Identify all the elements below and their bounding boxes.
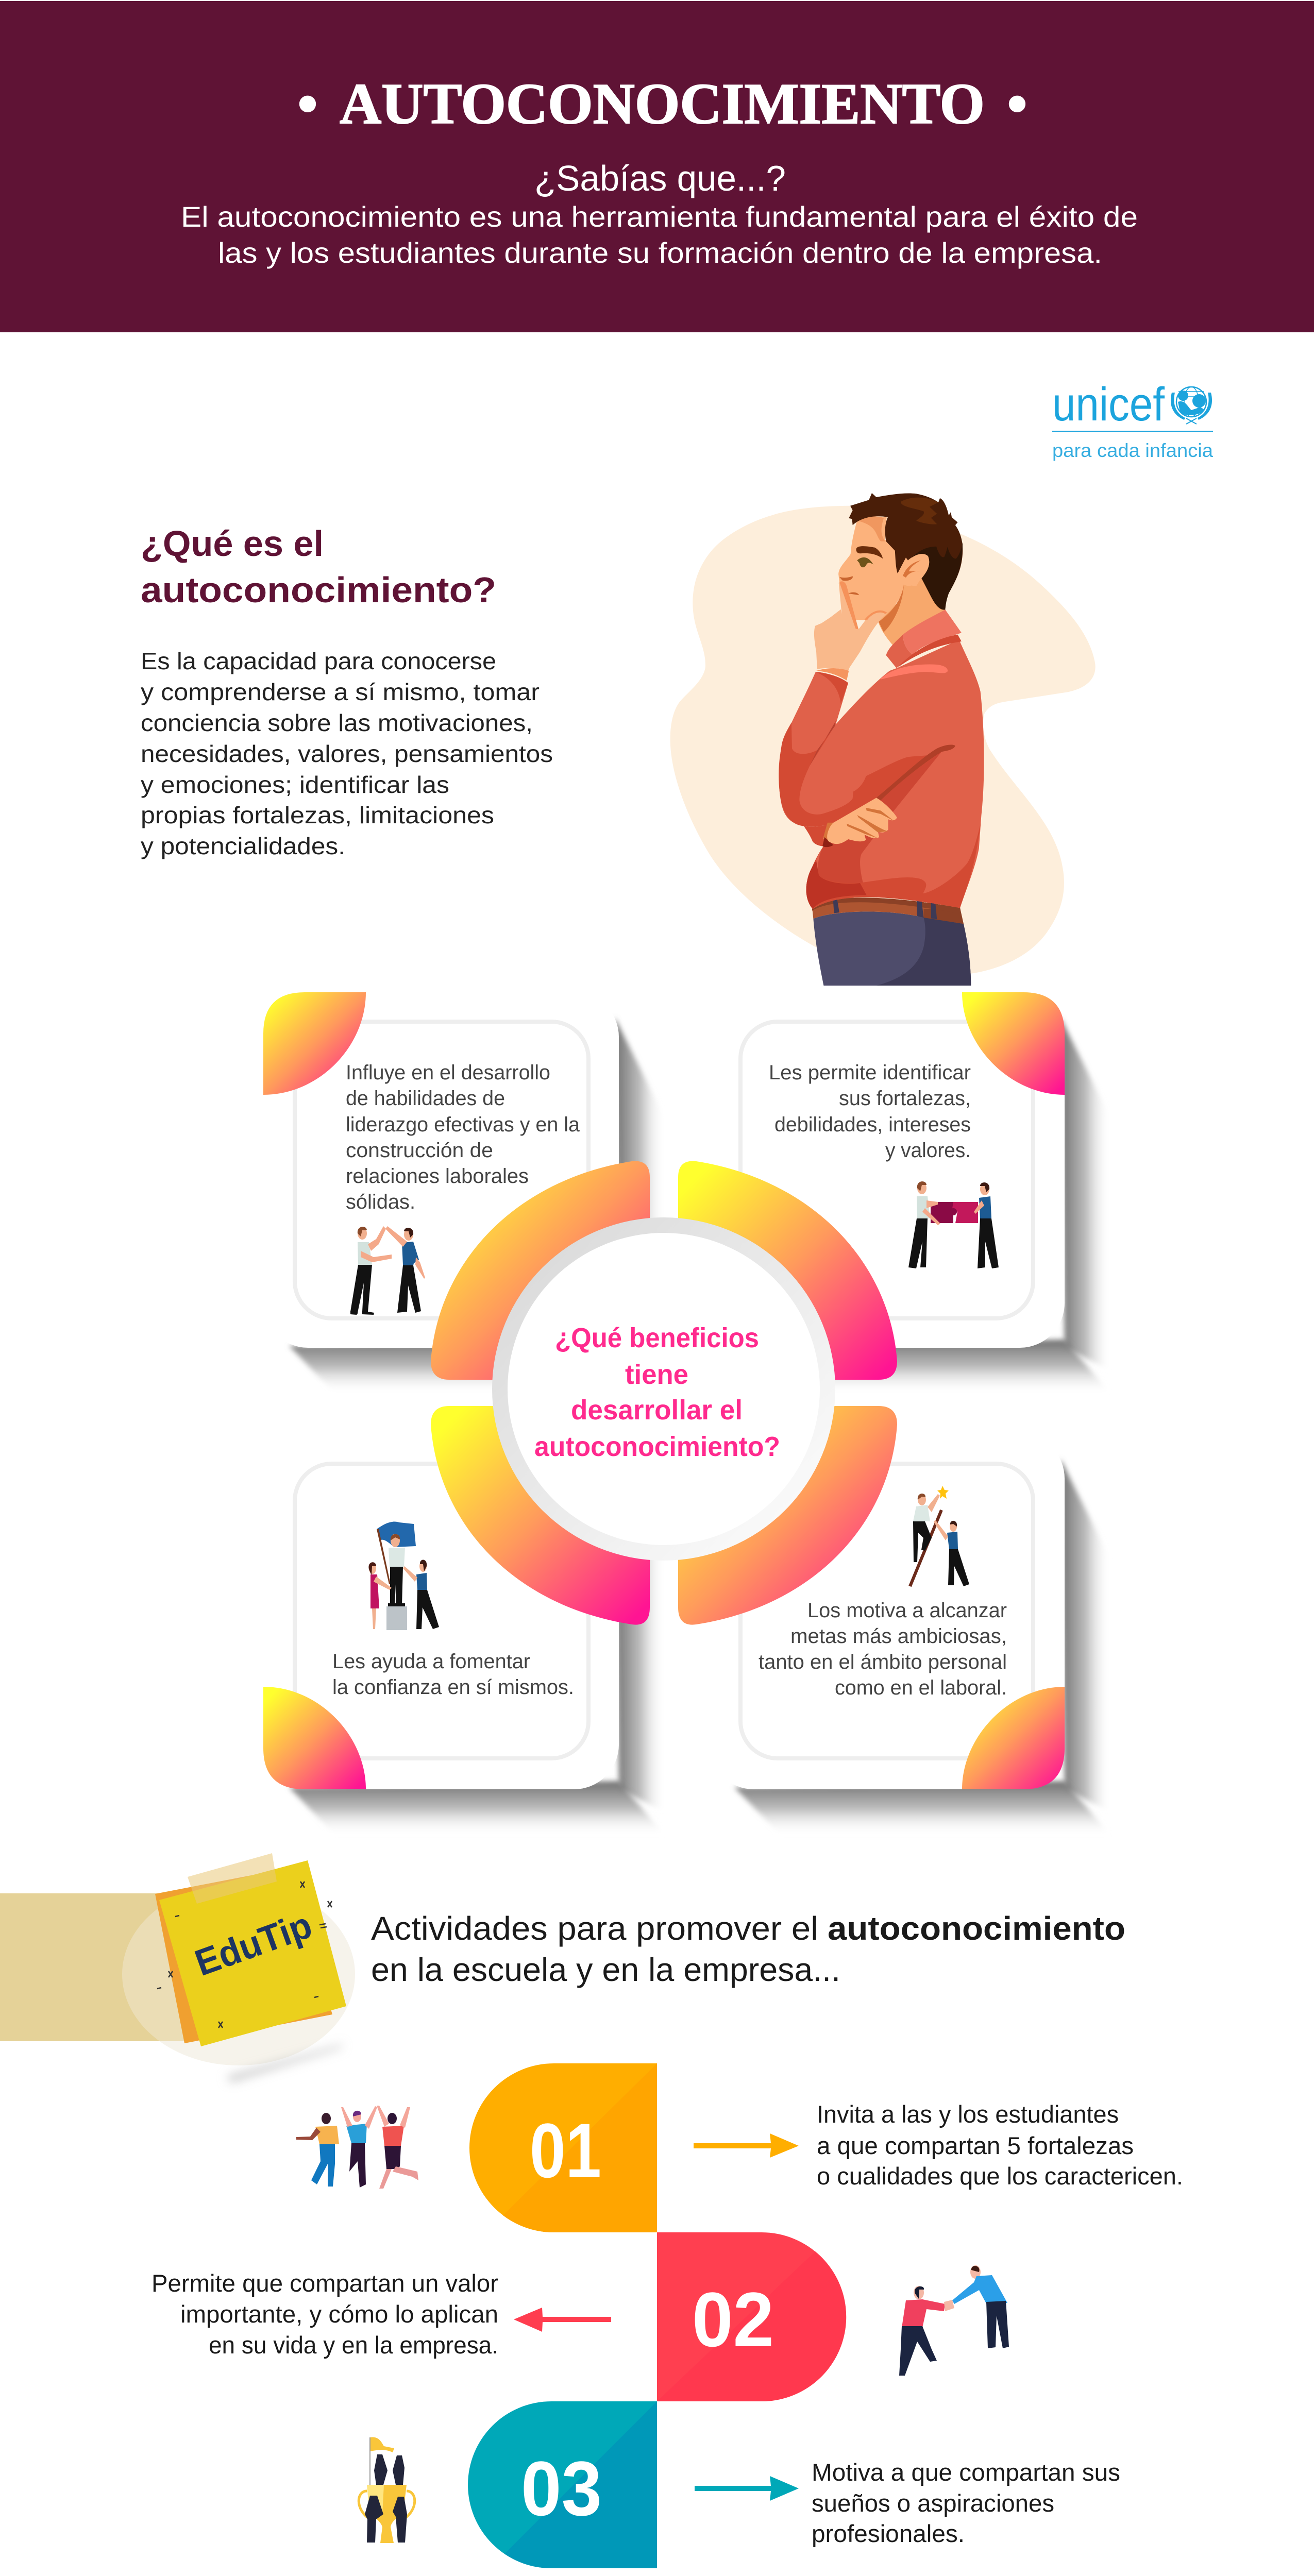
icon: helping handshake [899, 2265, 1009, 2376]
center question: autoconocimiento? [534, 1431, 780, 1462]
definition text block: y emociones; identificar las [141, 771, 449, 798]
step 01 text: Invita a las y los estudiantes [817, 2100, 1119, 2128]
blob background [670, 506, 1096, 974]
definition text block: y comprenderse a sí mismo, tomar [141, 679, 540, 705]
step 01 text [817, 2100, 1183, 2190]
illustration: thinking man [670, 493, 1096, 986]
step 03 text: profesionales. [812, 2520, 965, 2547]
icon: high five [350, 1226, 425, 1315]
arrow 02 [514, 2308, 611, 2332]
card: metas [709, 1434, 1110, 1835]
edutip badge [0, 1853, 355, 2081]
card text [759, 1599, 1007, 1699]
arrow 03 [695, 2476, 799, 2501]
icon: star ladder [910, 1486, 969, 1586]
unicef logo: para cada infancia [1052, 440, 1213, 461]
title: AUTOCONOCIMIENTO [340, 72, 985, 136]
card text [332, 1650, 574, 1699]
step 03 text: Motiva a que compartan sus [812, 2459, 1120, 2486]
center question [534, 1323, 780, 1462]
card: liderazgo [263, 992, 665, 1394]
unicef logo [1052, 378, 1213, 461]
card text: sus fortalezas, [839, 1087, 971, 1110]
edutip label: EduTip [190, 1905, 317, 1984]
arrow 01 [694, 2133, 799, 2158]
card text: relaciones laborales [346, 1165, 529, 1188]
section heading: que es: autoconocimiento? [141, 570, 496, 610]
card text: metas más ambiciosas, [790, 1625, 1007, 1648]
icon: trophy team [359, 2437, 415, 2543]
badge 01 [469, 2063, 657, 2232]
definition text block: propias fortalezas, limitaciones [141, 802, 494, 828]
intro text [181, 200, 1138, 269]
step 02 text: en su vida y en la empresa. [209, 2331, 498, 2359]
definition text block: y potencialidades. [141, 833, 345, 859]
definition text block: conciencia sobre las motivaciones, [141, 709, 533, 736]
definition text block: necesidades, valores, pensamientos [141, 740, 553, 767]
center circle [492, 1217, 835, 1561]
card text: de habilidades de [346, 1087, 505, 1110]
step 03 text: sueños o aspiraciones [812, 2489, 1054, 2517]
unicef logo: unicef [1052, 378, 1165, 431]
card text: la confianza en sí mismos. [332, 1676, 574, 1699]
step 03 text [812, 2459, 1120, 2547]
badge 03 [468, 2401, 657, 2568]
card text: debilidades, intereses [774, 1113, 971, 1136]
card text: Influye en el desarrollo [346, 1061, 550, 1084]
badge 03: 03 [521, 2445, 602, 2532]
card text [769, 1061, 971, 1162]
icon: flag team [368, 1521, 439, 1630]
card text: Les permite identificar [769, 1061, 971, 1084]
subtitle: ¿Sabías que...? [534, 158, 786, 198]
card text [346, 1061, 580, 1213]
card text: tanto en el ámbito personal [759, 1651, 1007, 1673]
card text: como en el laboral. [835, 1676, 1007, 1699]
badge 02: 02 [692, 2276, 774, 2363]
section heading: que es [141, 523, 496, 610]
title: • [1007, 72, 1027, 136]
icon: celebrating people [296, 2106, 418, 2189]
card text: y valores. [885, 1139, 971, 1162]
intro text: las y los estudiantes durante su formación dentro de la empresa. [218, 236, 1102, 269]
card text: Les ayuda a fomentar [332, 1650, 530, 1673]
title: • [297, 72, 318, 136]
step 01 [296, 2063, 1183, 2232]
intro text: El autoconocimiento es una herramienta fundamental para el éxito de [181, 200, 1138, 233]
card text: liderazgo efectivas y en la [346, 1113, 580, 1136]
badge 02 [657, 2232, 846, 2401]
card text: construcción de [346, 1139, 493, 1162]
benefits diagram [263, 992, 1110, 1835]
step 03 [359, 2401, 1120, 2568]
card text: sólidas. [346, 1191, 415, 1213]
step 02 text: importante, y cómo lo aplican [180, 2300, 498, 2328]
icon: unicef globe emblem [1171, 387, 1212, 424]
definition text block: Es la capacidad para conocerse [141, 648, 496, 674]
card: fortalezas [709, 992, 1110, 1394]
step 02 text [151, 2269, 498, 2359]
step 02 text: Permite que compartan un valor [151, 2269, 498, 2297]
center question: tiene [625, 1359, 688, 1390]
badge 01: 01 [530, 2107, 601, 2194]
definition text block [141, 648, 553, 859]
icon: puzzle team [908, 1181, 999, 1268]
activities heading: Actividades para promover el [371, 1910, 818, 1947]
card: confianza [263, 1434, 665, 1835]
ring segments [431, 1161, 897, 1625]
man figure [779, 493, 984, 986]
section heading: que es: ¿Qué es el [141, 523, 324, 564]
header band [0, 1, 1314, 332]
card text: Los motiva a alcanzar [807, 1599, 1007, 1622]
activities heading [371, 1910, 1125, 1988]
activities heading: en la escuela y en la empresa... [371, 1951, 840, 1988]
step 01 text: o cualidades que los caractericen. [817, 2162, 1183, 2190]
step 01 text: a que compartan 5 fortalezas [817, 2132, 1134, 2159]
center question: desarrollar el [571, 1395, 743, 1426]
step 02 [151, 2232, 1009, 2401]
activities heading: autoconocimiento [828, 1910, 1125, 1947]
center question: ¿Qué beneficios [555, 1323, 759, 1353]
